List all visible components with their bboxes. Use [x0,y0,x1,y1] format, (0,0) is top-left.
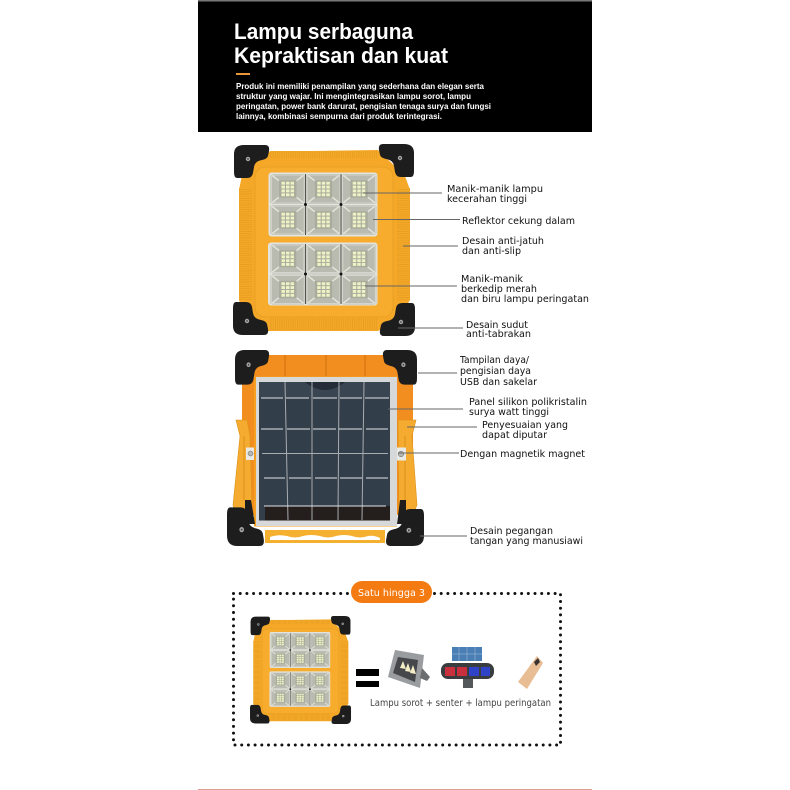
callout: handle [420,526,583,547]
callout: high brightness beads: Manik-manik lampu [447,184,543,195]
callout: solar panel [388,397,587,418]
product front view [233,144,415,336]
magnets [246,448,406,460]
panel: one to three comparison [234,581,560,745]
back view callouts [388,355,587,547]
callout: magnet: Dengan magnetik magnet [460,449,585,460]
back housing [242,355,413,515]
callout: high brightness beads [363,184,543,205]
callout: warning beads [365,274,589,305]
badge: one to three [351,581,432,603]
callout: corner design [398,320,531,340]
callout: rotating adjustment [407,420,568,441]
intro paragraph: Produk ini memiliki penampilan yang sederhana dan elegan serta [236,81,484,91]
intro paragraph: peringatan, power bank darurat, pengisian tenaga surya dan fungsi [236,101,491,111]
callout: high brightness beads: kecerahan tinggi [447,194,527,205]
callout: display and switch [418,355,538,388]
right stand [398,420,417,522]
callout: corner design: anti-tabrakan [466,329,531,340]
handle [265,530,385,543]
callout: handle: tangan yang manusiawi [470,536,583,547]
callout: warning beads: dan biru lampu peringatan [461,294,589,305]
callout: corner design: Desain sudut [466,320,528,331]
icon: warning light [441,647,494,688]
small product image [250,616,351,724]
callout: anti-drop: Desain anti-jatuh [462,236,544,247]
callout: solar panel: surya watt tinggi [469,407,549,418]
solar panel [254,376,397,526]
product back view [227,350,424,546]
header band [198,0,592,132]
callout: anti-drop [403,236,544,257]
callout: warning beads: berkedip merah [461,284,537,295]
callout: display and switch: USB dan sakelar [460,377,538,388]
callout: display and switch: Tampilan daya/ [459,355,530,366]
callout: rotating adjustment: Penyesuaian yang [482,420,568,431]
intro paragraph [236,81,491,121]
callout: anti-drop: dan anti-slip [462,246,521,257]
icon: power bank [518,656,543,689]
callout: warning beads: Manik-manik [461,274,523,285]
intro paragraph: lainnya, kombinasi sempurna dari produk terintegrasi. [236,111,442,121]
callout: solar panel: Panel silikon polikristalin [469,397,587,408]
front view callouts [363,184,589,340]
icon: floodlight [388,650,430,688]
orange accent bar [236,73,250,75]
inner black posts [245,500,406,524]
title [234,19,449,68]
callout: display and switch: pengisian daya [460,366,531,377]
title: Lampu serbaguna [234,19,414,44]
rubber corners [235,350,269,385]
equals sign [356,669,379,687]
callout: reflector: Reflektor cekung dalam [462,216,575,227]
badge: one to three: Satu hingga 3 [358,588,425,599]
callout: handle: Desain pegangan [470,526,553,537]
callout: rotating adjustment: dapat diputar [482,430,548,441]
intro paragraph: struktur yang wajar. Ini mengintegrasikan lampu sorot, lampu [236,91,471,101]
title: Kepraktisan dan kuat [234,43,449,68]
left stand [233,420,252,522]
caption: Lampu sorot + senter + lampu peringatan [370,698,551,709]
